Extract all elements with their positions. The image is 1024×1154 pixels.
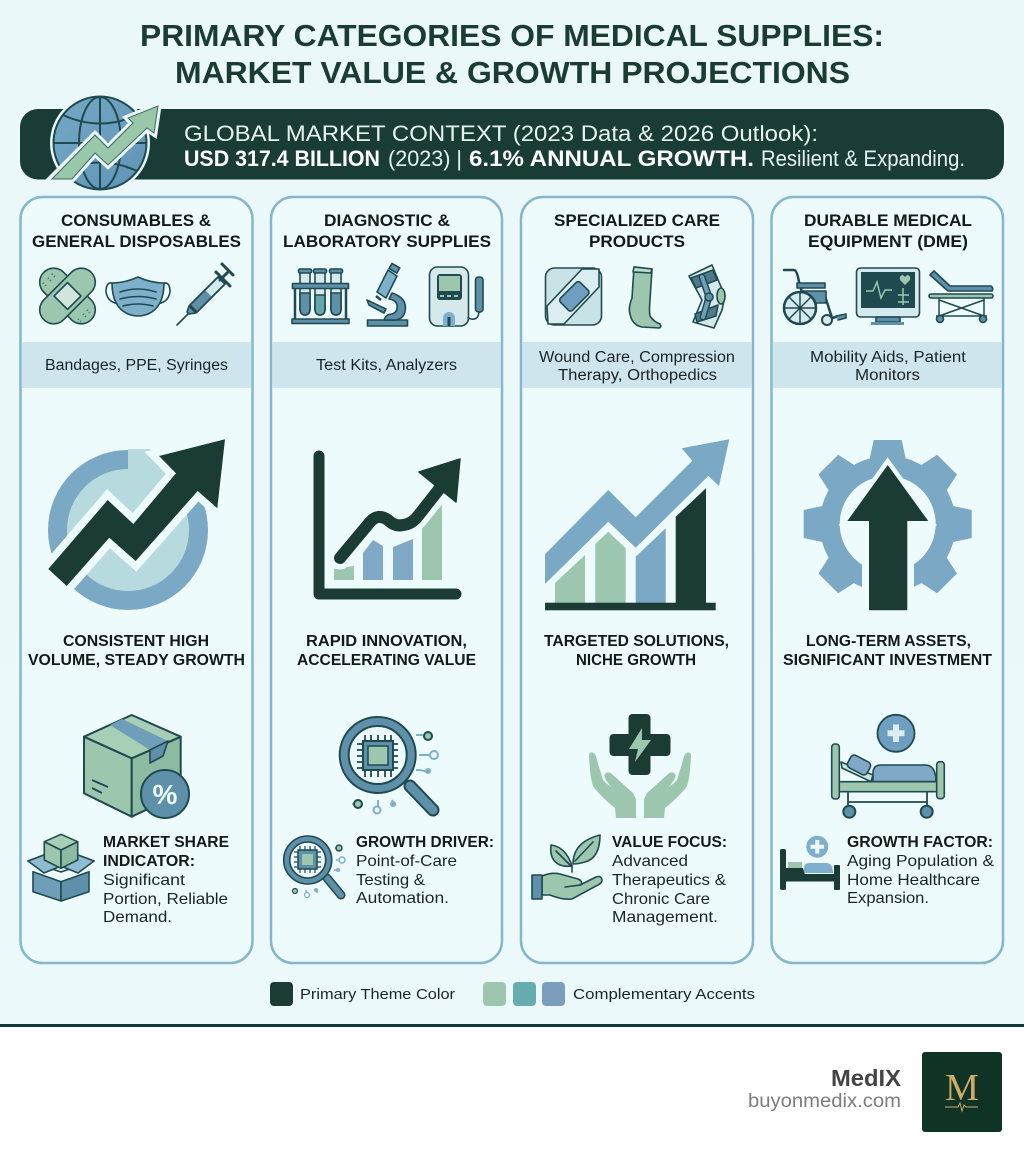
icon: compression sock (629, 267, 661, 328)
heading (554, 211, 720, 251)
value focus text (612, 834, 727, 926)
icon: hand with sprout (532, 835, 602, 899)
value focus text: Chronic Care (612, 891, 710, 908)
banner text: 6.1% ANNUAL GROWTH. (469, 146, 754, 171)
market share text: Significant (103, 872, 186, 889)
label: TARGETED SOLUTIONS, (544, 633, 729, 650)
label (783, 633, 993, 669)
panel: consumables and general disposables (20, 197, 252, 963)
icon: open box (28, 834, 94, 901)
growth driver text (356, 834, 494, 907)
market share text: MARKET SHARE (103, 834, 229, 851)
legend: Primary Theme Color (300, 986, 455, 1003)
growth factor text: Home Healthcare (847, 872, 980, 889)
label: VOLUME, STEADY GROWTH (28, 652, 245, 669)
icon: face mask (106, 277, 170, 316)
icon: microscope (367, 263, 408, 326)
heading: PRODUCTS (589, 232, 685, 251)
growth driver text: Point-of-Care (356, 853, 457, 870)
label: SIGNIFICANT INVESTMENT (783, 652, 993, 669)
value focus text: Therapeutics & (612, 872, 726, 889)
heading (804, 211, 972, 251)
banner text (184, 121, 965, 171)
title: MARKET VALUE & GROWTH PROJECTIONS (175, 55, 850, 90)
label (544, 633, 729, 669)
footer brand: MedIX (831, 1065, 902, 1091)
logo (922, 1052, 1002, 1132)
title (140, 18, 884, 90)
icon: hospital stretcher (929, 271, 993, 322)
icon: patient monitor (856, 268, 920, 325)
panel: specialized care products (521, 197, 753, 963)
growth factor text (847, 834, 994, 907)
heading (32, 211, 241, 251)
icon: test tube rack (292, 269, 349, 324)
icon: wheelchair (784, 270, 846, 325)
banner text: (2023) | (388, 146, 462, 171)
title: PRIMARY CATEGORIES OF MEDICAL SUPPLIES: (140, 18, 884, 53)
footer brand (748, 1052, 1002, 1132)
heading: EQUIPMENT (DME) (808, 232, 968, 251)
growth factor text: Expansion. (847, 890, 929, 907)
label: CONSISTENT HIGH (63, 633, 209, 650)
legend: Complementary Accents (573, 986, 755, 1003)
sub-label: Test Kits, Analyzers (316, 357, 457, 374)
icon: knee brace (689, 265, 725, 328)
label: RAPID INNOVATION, (306, 633, 467, 650)
value focus text: VALUE FOCUS: (612, 834, 727, 851)
banner text: USD 317.4 BILLION (184, 146, 380, 171)
growth driver text: GROWTH DRIVER: (356, 834, 494, 851)
illustration: rising bar chart (319, 456, 460, 594)
panel: durable medical equipment (772, 197, 1003, 963)
label (28, 633, 245, 669)
label: ACCELERATING VALUE (297, 652, 476, 669)
icon: box with percent badge (84, 715, 189, 818)
banner text: GLOBAL MARKET CONTEXT (2023 Data & 2026 Outlook): (184, 121, 818, 146)
icon: globe with growth arrow (50, 93, 158, 193)
value focus text: Advanced (612, 853, 688, 870)
growth factor text: Aging Population & (847, 853, 994, 870)
legend (270, 982, 755, 1006)
heading (283, 211, 491, 251)
sub-label (810, 349, 967, 384)
market share text: INDICATOR: (103, 853, 195, 870)
icon: analyzer (430, 267, 483, 326)
label (297, 633, 476, 669)
market share text (103, 834, 229, 926)
icon: box with percent badge: % (153, 779, 178, 810)
heading: SPECIALIZED CARE (554, 211, 720, 230)
sub-label: Bandages, PPE, Syringes (45, 357, 228, 374)
growth driver text: Testing & (356, 872, 425, 889)
banner text: Resilient & Expanding. (761, 146, 965, 171)
logo: M (945, 1067, 979, 1109)
illustration: rising bars with arrow (545, 439, 729, 610)
value focus text: Management. (612, 909, 718, 926)
icon: home bed with cross (780, 836, 840, 890)
sub-label (539, 349, 735, 384)
sub-label: Monitors (855, 367, 920, 384)
global market context banner (20, 93, 1004, 193)
illustration: gear with up arrow (804, 440, 972, 612)
icon: hospital bed (832, 715, 944, 818)
label: LONG-TERM ASSETS, (806, 633, 971, 650)
growth driver text: Automation. (356, 890, 449, 907)
icon: syringe (177, 264, 233, 325)
growth factor text: GROWTH FACTOR: (847, 834, 993, 851)
label: NICHE GROWTH (576, 652, 696, 669)
sub-label: Wound Care, Compression (539, 349, 735, 366)
heading: GENERAL DISPOSABLES (32, 232, 241, 251)
heading: DIAGNOSTIC & (324, 211, 450, 230)
sub-label: Mobility Aids, Patient (810, 349, 967, 366)
icon: bandage (34, 262, 101, 330)
icon: wound dressing (546, 268, 602, 325)
footer brand: buyonmedix.com (748, 1091, 901, 1112)
icon: hands holding cross (589, 714, 691, 818)
sub-label: Therapy, Orthopedics (558, 367, 717, 384)
heading: LABORATORY SUPPLIES (283, 232, 491, 251)
market share text: Portion, Reliable (103, 891, 228, 908)
heading: CONSUMABLES & (61, 211, 211, 230)
icon: magnifier with chip (340, 717, 438, 814)
panel: diagnostic and laboratory supplies (271, 197, 502, 963)
icon: small magnifier with chip (284, 836, 345, 898)
illustration: growth arrow over ring (48, 439, 225, 610)
market share text: Demand. (103, 909, 172, 926)
heading: DURABLE MEDICAL (804, 211, 972, 230)
